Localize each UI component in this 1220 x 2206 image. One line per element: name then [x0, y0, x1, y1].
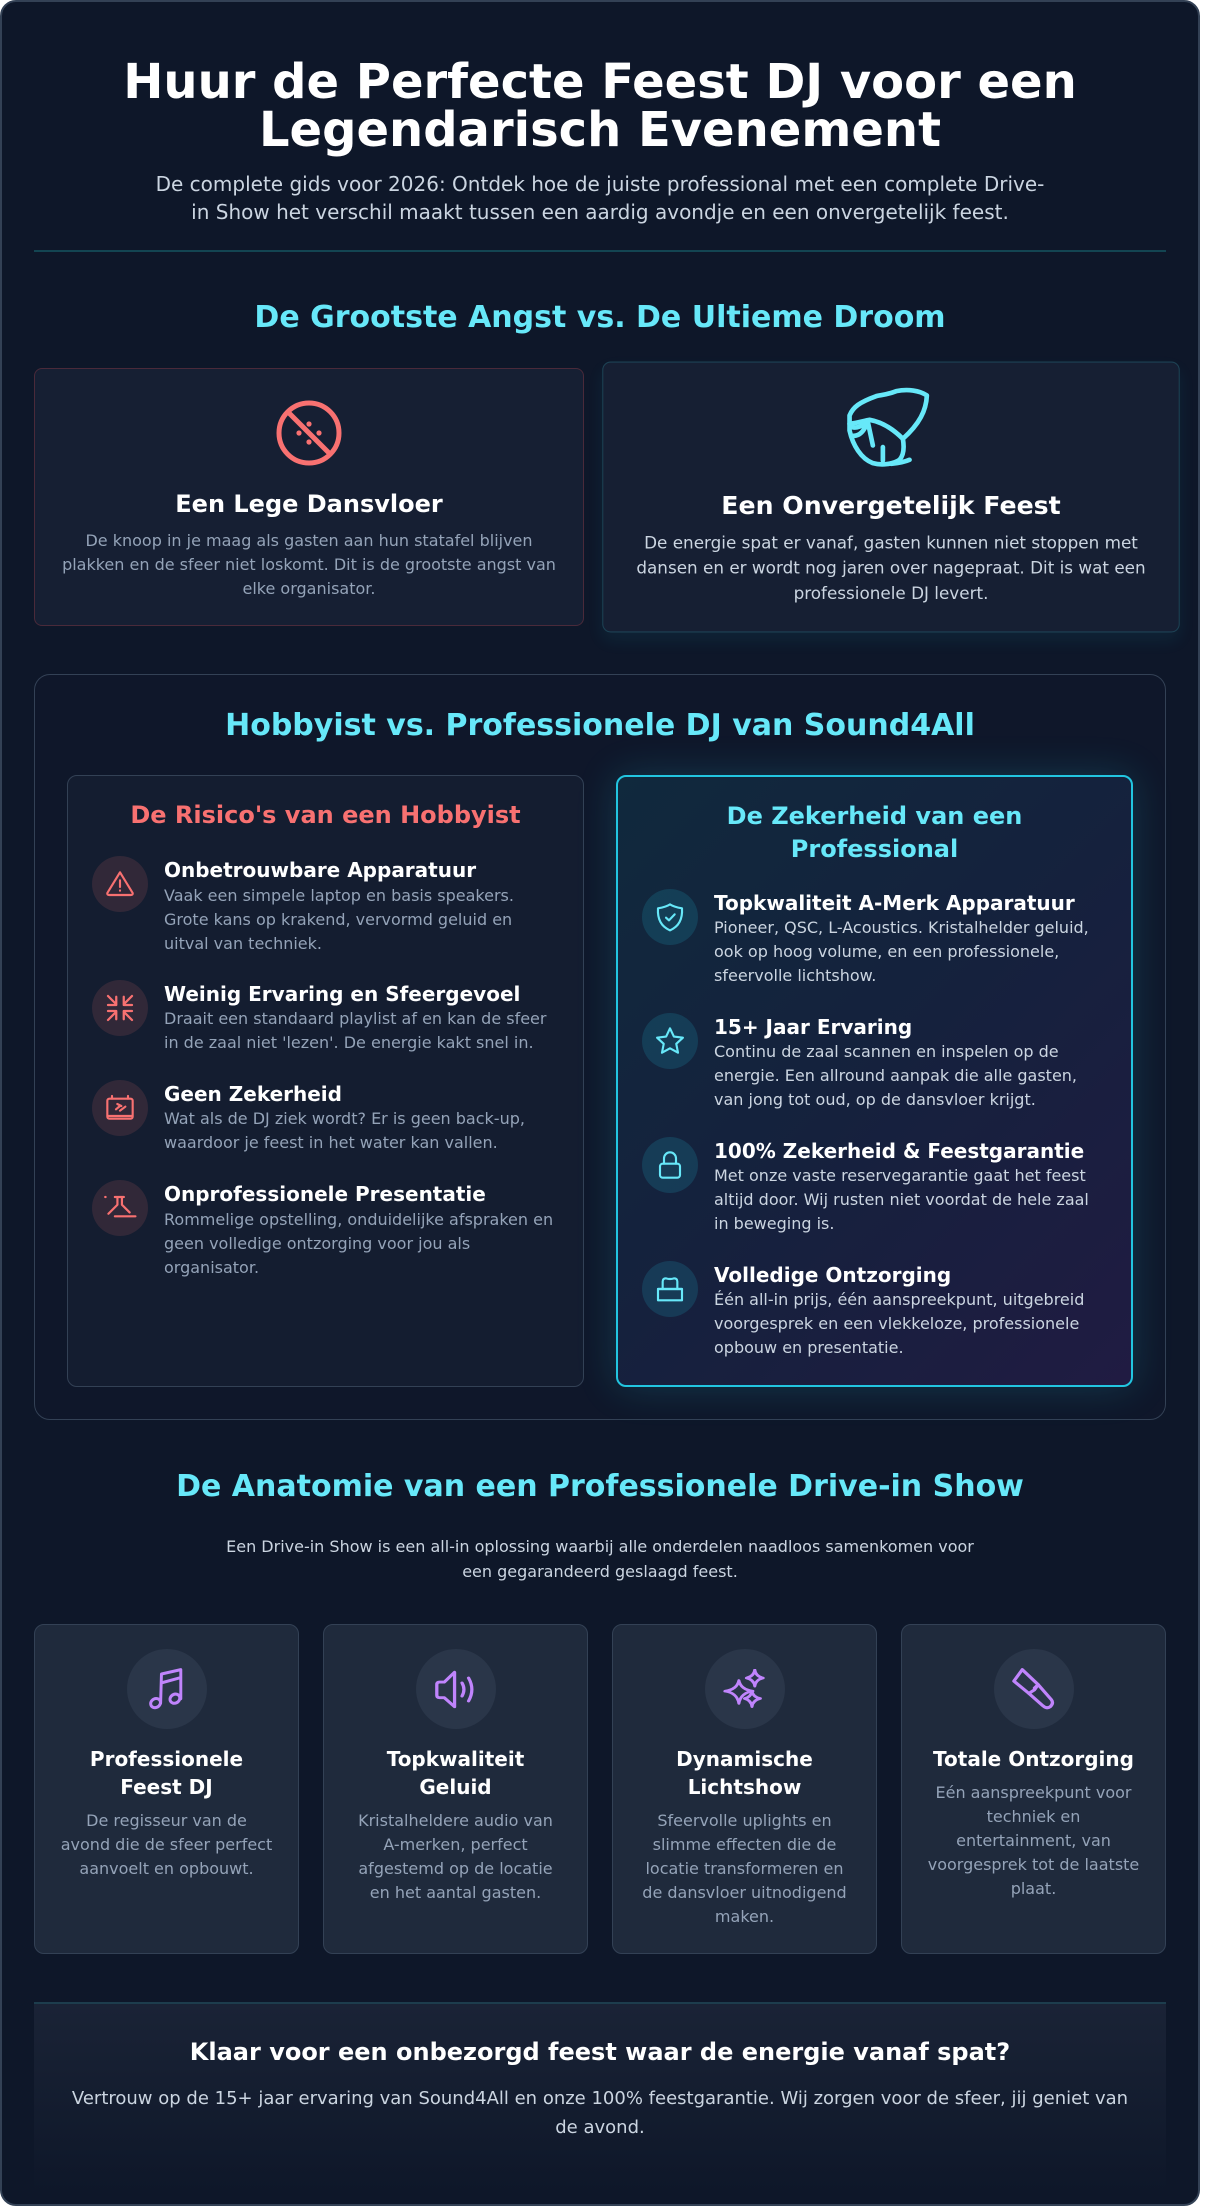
card title: Totale Ontzorging: [933, 1747, 1134, 1771]
card text: [928, 1783, 1139, 1898]
card text: [642, 1811, 847, 1926]
card text: locatie transformeren en: [645, 1859, 844, 1878]
cta heading: Klaar voor een onbezorgd feest waar de energie vanaf spat?: [190, 2038, 1010, 2066]
card text: professionele DJ levert.: [794, 583, 988, 603]
pro title: 100% Zekerheid & Feestgarantie: [714, 1139, 1084, 1163]
risk text: uitval van techniek.: [164, 934, 322, 953]
risk text: geen volledige ontzorging voor jou als: [164, 1234, 470, 1253]
title: Legendarisch Evenement: [259, 102, 941, 158]
panel: fear card: [34, 368, 584, 626]
pro text: in beweging is.: [714, 1214, 834, 1233]
risk item 3: [92, 1080, 525, 1152]
call to action: [34, 2002, 1166, 2192]
panel: hobbyist vs professional: [34, 674, 1166, 1420]
pro text: sfeervolle lichtshow.: [714, 966, 876, 985]
header divider: [34, 250, 1166, 252]
title: Huur de Perfecte Feest DJ voor een: [123, 54, 1077, 110]
card title: Een Onvergetelijk Feest: [721, 491, 1061, 520]
panel: hobbyist risks: [67, 775, 584, 1387]
pro title: Volledige Ontzorging: [714, 1263, 951, 1287]
pro title: 15+ Jaar Ervaring: [714, 1015, 912, 1039]
card text: [61, 1811, 272, 1878]
risk text: waardoor je feest in het water kan vallen.: [164, 1133, 498, 1152]
risk text: [164, 1009, 546, 1052]
card text: slimme effecten die de: [653, 1835, 836, 1854]
pro title: Topkwaliteit A-Merk Apparatuur: [714, 891, 1075, 915]
risk text: Draait een standaard playlist af en kan de sfeer: [164, 1009, 546, 1028]
icon: speaker: [416, 1649, 496, 1729]
risk text: [164, 886, 514, 953]
pro text: Met onze vaste reservegarantie gaat het feest: [714, 1166, 1086, 1185]
card text: plaat.: [1011, 1879, 1056, 1898]
pro item 3: [642, 1137, 1089, 1233]
card title: Een Lege Dansvloer: [175, 490, 443, 518]
pro text: voorgesprek en een vlekkeloze, professionele: [714, 1314, 1079, 1333]
risk item 2: [92, 980, 546, 1052]
icon: warning: [92, 856, 148, 912]
pro item 2: [642, 1013, 1077, 1109]
card text: dansen en er wordt nog jaren over nagepraat. Dit is wat een: [636, 558, 1146, 578]
pro text: opbouw en presentatie.: [714, 1338, 904, 1357]
risk item 4: [92, 1180, 553, 1277]
title: [123, 54, 1077, 158]
card text: De knoop in je maag als gasten aan hun statafel blijven: [85, 531, 533, 550]
card title: Geluid: [419, 1775, 492, 1799]
icon: lock: [642, 1137, 698, 1193]
heading: fear vs dream: De Grootste Angst vs. De Ultieme Droom: [254, 300, 946, 335]
pro text: [714, 1042, 1077, 1109]
risk text: [164, 1109, 525, 1152]
card text: techniek en: [987, 1807, 1080, 1826]
panel: dream card: [602, 362, 1180, 632]
risk title: Onprofessionele Presentatie: [164, 1182, 486, 1206]
card text: de dansvloer uitnodigend: [642, 1883, 847, 1902]
heading: certainty: Professional: [791, 835, 958, 863]
pro text: altijd door. Wij rusten niet voordat de hele zaal: [714, 1190, 1089, 1209]
heading: certainty: [727, 802, 1022, 863]
icon: link: [994, 1649, 1074, 1729]
anatomy intro: Een Drive-in Show is een all-in oplossing waarbij alle onderdelen naadloos samenkomen voor: [226, 1537, 974, 1556]
card text: Kristalheldere audio van: [358, 1811, 553, 1830]
icon: shield check: [642, 889, 698, 945]
card text: A-merken, perfect: [383, 1835, 528, 1854]
icon: sparkles: [704, 1649, 784, 1729]
card title: [676, 1747, 813, 1799]
icon: star: [642, 1013, 698, 1069]
pro text: [714, 918, 1089, 985]
risk text: Grote kans op krakend, vervormd geluid en: [164, 910, 512, 929]
card text: afgestemd op de locatie: [358, 1859, 553, 1878]
card text: De regisseur van de: [86, 1811, 247, 1830]
cta text: [72, 2088, 1128, 2138]
card text: [62, 531, 556, 598]
cta text: Vertrouw op de 15+ jaar ervaring van Sound4All en onze 100% feestgarantie. Wij zorgen voor de sfeer, jij geniet van: [72, 2088, 1128, 2109]
subtitle: De complete gids voor 2026: Ontdek hoe de juiste professional met een complete Drive-: [156, 172, 1044, 196]
card title: Topkwaliteit: [387, 1747, 524, 1771]
risk text: Rommelige opstelling, onduidelijke afspraken en: [164, 1210, 553, 1229]
risk title: Onbetrouwbare Apparatuur: [164, 858, 476, 882]
pro item 1: [642, 889, 1089, 985]
card title: [90, 1747, 243, 1799]
pro text: van jong tot oud, op de dansvloer krijgt.: [714, 1090, 1036, 1109]
card title: Professionele: [90, 1747, 243, 1771]
card text: entertainment, van: [956, 1831, 1111, 1850]
card text: [358, 1811, 553, 1902]
card text: De energie spat er vanaf, gasten kunnen niet stoppen met: [644, 533, 1138, 553]
card title: Lichtshow: [688, 1775, 801, 1799]
risk text: Wat als de DJ ziek wordt? Er is geen back-up,: [164, 1109, 525, 1128]
icon: empty dance floor: [276, 400, 342, 466]
card: care: [901, 1624, 1166, 1954]
icon: broken calendar: [92, 1080, 148, 1136]
card text: plakken en de sfeer niet loskomt. Dit is de grootste angst van: [62, 555, 556, 574]
pro text: Pioneer, QSC, L-Acoustics. Kristalhelder geluid,: [714, 918, 1089, 937]
heading: comparison: Hobbyist vs. Professionele DJ van Sound4All: [225, 708, 975, 743]
card text: aanvoelt en opbouwt.: [79, 1859, 254, 1878]
icon: arrows inward: [92, 980, 148, 1036]
card text: Eén aanspreekpunt voor: [935, 1783, 1132, 1802]
risk title: Geen Zekerheid: [164, 1082, 342, 1106]
card text: voorgesprek tot de laatste: [928, 1855, 1139, 1874]
card text: maken.: [715, 1907, 774, 1926]
card text: avond die de sfeer perfect: [61, 1835, 272, 1854]
heading: certainty: De Zekerheid van een: [727, 802, 1022, 830]
risk text: in de zaal niet 'lezen'. De energie kakt snel in.: [164, 1033, 534, 1052]
heading: risks: De Risico's van een Hobbyist: [130, 801, 521, 829]
pro item 4: [642, 1261, 1084, 1357]
subtitle: in Show het verschil maakt tussen een aardig avondje en een onvergetelijk feest.: [191, 200, 1009, 224]
card text: en het aantal gasten.: [370, 1883, 541, 1902]
risk title: Weinig Ervaring en Sfeergevoel: [164, 982, 520, 1006]
card: professional DJ: [34, 1624, 299, 1954]
pro text: [714, 1290, 1084, 1357]
cta text: de avond.: [555, 2117, 645, 2138]
icon: music notes: [126, 1649, 206, 1729]
risk item 1: [92, 856, 514, 953]
pro text: Één all-in prijs, één aanspreekpunt, uitgebreid: [714, 1290, 1084, 1309]
anatomy intro: een gegarandeerd geslaagd feest.: [462, 1562, 738, 1581]
card text: [636, 533, 1146, 603]
icon: all-in case: [642, 1261, 698, 1317]
risk text: [164, 1210, 553, 1277]
pro text: energie. Een allround aanpak die alle gasten,: [714, 1066, 1077, 1085]
heading: anatomy: De Anatomie van een Professionele Drive-in Show: [176, 1469, 1024, 1504]
card title: Feest DJ: [120, 1775, 213, 1799]
anatomy intro: [226, 1537, 974, 1581]
card title: [386, 1747, 524, 1799]
card text: elke organisator.: [243, 579, 375, 598]
card: sound: [323, 1624, 588, 1954]
icon: messy setup: [92, 1180, 148, 1236]
icon: dream leaf: [847, 388, 930, 467]
pro text: Continu de zaal scannen en inspelen op de: [714, 1042, 1059, 1061]
card title: Dynamische: [676, 1747, 813, 1771]
panel: professional certainty: [616, 775, 1133, 1387]
risk text: organisator.: [164, 1258, 259, 1277]
subtitle: [156, 172, 1044, 224]
pro text: [714, 1166, 1089, 1233]
card: lights: [612, 1624, 877, 1954]
risk text: Vaak een simpele laptop en basis speakers.: [164, 886, 514, 905]
pro text: ook op hoog volume, en een professionele,: [714, 942, 1059, 961]
card text: Sfeervolle uplights en: [657, 1811, 832, 1830]
